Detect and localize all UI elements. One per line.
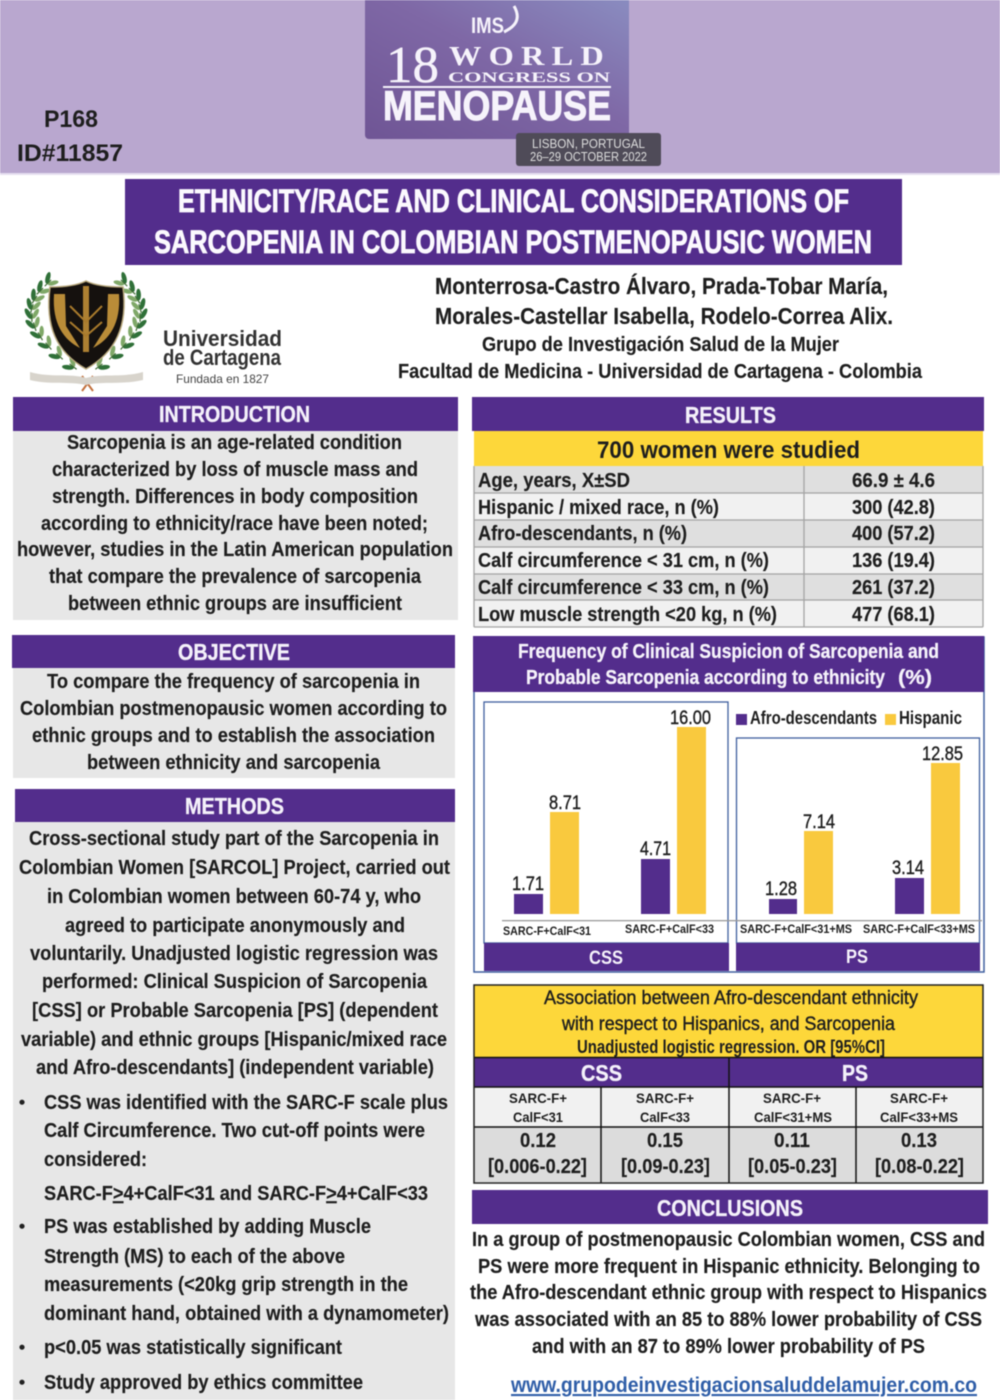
methods paragraph: Cross-sectional study part of the Sarcopenia in bbox=[29, 828, 439, 850]
methods bullet: PS: PS was established by adding Muscle bbox=[44, 1216, 371, 1238]
association cells: [0.09-0.23] bbox=[621, 1156, 710, 1178]
heading: introduction bbox=[13, 397, 458, 431]
congress location badge bbox=[516, 133, 661, 166]
table rows: 400 (57.2) bbox=[852, 523, 935, 545]
bar chart: PS: SARC-F+CalF<33+MS bbox=[863, 922, 975, 936]
sample size banner bbox=[474, 431, 983, 466]
authors and affiliation: Morales-Castellar Isabella, Rodelo-Correa Alix. bbox=[435, 303, 893, 329]
bar chart: PS: 3.14 bbox=[892, 858, 924, 879]
association cells: SARC-F+ bbox=[890, 1090, 948, 1106]
icon: laurel wreath bbox=[22, 270, 150, 376]
panel: conclusions bbox=[470, 1190, 988, 1358]
methods bullet: CSS: SARC-F>4+CalF<31 and SARC-F>4+CalF<33 bbox=[44, 1183, 428, 1205]
methods paragraph: Colombian Women [SARCOL] Project, carried out bbox=[19, 857, 450, 879]
association heading bbox=[474, 985, 983, 1057]
conclusions text bbox=[470, 1229, 987, 1358]
PS label bar: PS bbox=[846, 947, 868, 968]
methods paragraph: [CSS] or Probable Sarcopenia [PS] (dependent bbox=[32, 1000, 438, 1022]
congress logo: IMS bbox=[471, 13, 504, 38]
chart heading: Probable Sarcopenia according to ethnicity bbox=[526, 667, 886, 689]
bar chart: PS: SARC-F+CalF<31+MS bbox=[740, 922, 852, 936]
poster id: P168 bbox=[44, 106, 98, 133]
panel: frequency chart bbox=[473, 636, 984, 972]
methods paragraph: voluntarily. Unadjusted logistic regression was bbox=[30, 943, 438, 965]
association group headers: CSS bbox=[581, 1060, 622, 1086]
association group headers bbox=[474, 1058, 983, 1087]
methods bullet: CSS bbox=[19, 1092, 448, 1205]
methods paragraph: and Afro-descendants] (independent variable) bbox=[36, 1057, 434, 1079]
bar chart: CSS: 8.71 bbox=[549, 793, 581, 814]
methods bullet: PS: measurements (<20kg grip strength in the bbox=[44, 1274, 408, 1296]
authors and affiliation: Monterrosa-Castro Álvaro, Prada-Tobar María, bbox=[435, 272, 888, 299]
association cells: CalF<31 bbox=[513, 1109, 563, 1125]
table rows: Afro-descendants, n (%) bbox=[478, 523, 687, 545]
congress logo: CONGRESS ON bbox=[448, 70, 610, 86]
icon: ribbon and staves bbox=[30, 372, 143, 391]
methods paragraph: agreed to participate anonymously and bbox=[65, 915, 405, 937]
legend bbox=[736, 708, 962, 728]
association cells: 0.13 bbox=[901, 1130, 937, 1152]
introduction text: Sarcopenia is an age-related condition bbox=[67, 432, 402, 454]
congress logo bbox=[365, 0, 629, 139]
table rows bbox=[474, 466, 983, 627]
heading: methods: METHODS bbox=[185, 793, 284, 819]
association cells: [0.08-0.22] bbox=[875, 1156, 964, 1178]
panel: association table bbox=[474, 985, 983, 1183]
table rows: 136 (19.4) bbox=[852, 550, 935, 572]
table rows: Calf circumference < 31 cm, n (%) bbox=[478, 550, 769, 572]
objective text: ethnic groups and to establish the association bbox=[32, 725, 435, 747]
methods bullet: CSS: Calf Circumference. Two cut-off points were bbox=[44, 1120, 425, 1142]
association cells bbox=[474, 985, 983, 1183]
heading: introduction: INTRODUCTION bbox=[159, 401, 310, 427]
heading: objective bbox=[12, 635, 455, 668]
methods paragraph: variable) and ethnic groups [Hispanic/mixed race bbox=[21, 1029, 447, 1051]
methods bullet: PS: Strength (MS) to each of the above bbox=[44, 1246, 345, 1268]
association cells: SARC-F+ bbox=[636, 1090, 694, 1106]
methods paragraph bbox=[19, 828, 450, 1079]
introduction text: that compare the prevalence of sarcopenia bbox=[49, 566, 422, 588]
methods bullet: significance: p<0.05 was statistically significant bbox=[44, 1337, 342, 1359]
bar chart: PS: 1.28 bbox=[765, 879, 797, 900]
university name: de Cartagena bbox=[163, 345, 282, 370]
introduction text: however, studies in the Latin American population bbox=[17, 539, 453, 561]
association cells: CalF<33 bbox=[640, 1109, 690, 1125]
heading: conclusions bbox=[472, 1190, 988, 1224]
objective text: Colombian postmenopausic women according to bbox=[20, 698, 447, 720]
top banner bbox=[0, 0, 1000, 175]
authors and affiliation: Grupo de Investigación Salud de la Mujer bbox=[482, 334, 839, 356]
congress location badge: LISBON, PORTUGAL bbox=[532, 136, 645, 151]
introduction text: characterized by loss of muscle mass and bbox=[52, 459, 418, 481]
methods bullet: CSS: considered: bbox=[44, 1149, 147, 1171]
bar chart: PS: 12.85 bbox=[922, 744, 963, 765]
introduction text: according to ethnicity/race have been noted; bbox=[41, 513, 428, 535]
heading: results: RESULTS bbox=[685, 402, 776, 428]
panel: results table bbox=[472, 397, 984, 627]
university name bbox=[163, 326, 282, 386]
table rows: Hispanic / mixed race, n (%) bbox=[478, 497, 719, 519]
bar chart: CSS bbox=[484, 702, 729, 971]
methods paragraph: performed: Clinical Suspicion of Sarcopenia bbox=[42, 971, 428, 993]
university name: Universidad bbox=[163, 326, 282, 351]
objective text: To compare the frequency of sarcopenia in bbox=[47, 671, 420, 693]
table rows: 261 (37.2) bbox=[852, 577, 935, 599]
introduction text: strength. Differences in body composition bbox=[52, 486, 418, 508]
bar chart: CSS: SARC-F+CalF<31 bbox=[503, 924, 591, 938]
poster id bbox=[17, 106, 123, 167]
table rows: Age, years, X±SD bbox=[478, 470, 630, 492]
objective text bbox=[20, 671, 447, 774]
association cells: [0.006-0.22] bbox=[488, 1156, 587, 1178]
CSS label bar: CSS bbox=[589, 948, 623, 969]
university logo bbox=[22, 270, 282, 391]
association cells: CalF<31+MS bbox=[754, 1109, 832, 1125]
association heading: Unadjusted logistic regression. OR [95%CI] bbox=[577, 1037, 885, 1057]
legend: Afro-descendants bbox=[750, 708, 877, 728]
authors and affiliation bbox=[398, 272, 923, 383]
panel: methods bbox=[13, 789, 455, 1400]
association cells: 0.11 bbox=[774, 1130, 810, 1152]
introduction text: between ethnic groups are insufficient bbox=[68, 593, 402, 615]
CSS label bar bbox=[484, 943, 729, 971]
bar chart: CSS: 1.71 bbox=[512, 874, 544, 895]
objective text: between ethnicity and sarcopenia bbox=[87, 752, 381, 774]
methods bullet: CSS: CSS was identified with the SARC-F scale plus bbox=[44, 1092, 448, 1114]
methods bullet: PS bbox=[19, 1216, 449, 1325]
authors and affiliation: Facultad de Medicina - Universidad de Cartagena - Colombia bbox=[398, 361, 923, 383]
chart heading: (%) bbox=[898, 667, 932, 689]
table rows: Calf circumference < 33 cm, n (%) bbox=[478, 577, 769, 599]
association cells: 0.15 bbox=[647, 1130, 683, 1152]
poster id: ID#11857 bbox=[17, 140, 123, 167]
chart heading bbox=[473, 636, 984, 692]
table rows: 477 (68.1) bbox=[852, 604, 935, 626]
table rows: Low muscle strength <20 kg, n (%) bbox=[478, 604, 777, 626]
bar chart: CSS: SARC-F+CalF<33 bbox=[625, 922, 714, 936]
heading: results bbox=[472, 397, 984, 431]
association group headers: PS bbox=[842, 1060, 868, 1086]
title bbox=[125, 179, 902, 265]
methods bullet: ethics: Study approved by ethics committee bbox=[44, 1372, 363, 1394]
sample size banner: 700 women were studied bbox=[597, 437, 860, 464]
methods paragraph: in Colombian women between 60-74 y, who bbox=[47, 886, 421, 908]
heading: methods bbox=[15, 789, 455, 822]
bar chart: CSS: 16.00 bbox=[670, 708, 711, 729]
table rows: 300 (42.8) bbox=[852, 497, 935, 519]
conclusions text: and with an 87 to 89% lower probability of PS bbox=[532, 1336, 925, 1358]
congress logo: 18 bbox=[386, 37, 439, 94]
association cells: SARC-F+ bbox=[763, 1090, 821, 1106]
bar chart: PS bbox=[736, 738, 980, 971]
bar chart: PS: 7.14 bbox=[803, 812, 835, 833]
congress location badge: 26–29 OCTOBER 2022 bbox=[530, 149, 647, 164]
congress logo: WORLD bbox=[449, 41, 611, 71]
university name: Fundada en 1827 bbox=[176, 372, 269, 386]
association cells: CalF<33+MS bbox=[880, 1109, 958, 1125]
bar chart: CSS: 4.71 bbox=[640, 839, 671, 860]
panel: objective bbox=[12, 635, 455, 778]
panel: introduction bbox=[13, 397, 458, 620]
heading: conclusions: CONCLUSIONS bbox=[657, 1195, 803, 1221]
heading: objective: OBJECTIVE bbox=[178, 639, 290, 665]
association heading: Association between Afro-descendant ethnicity bbox=[544, 988, 918, 1009]
legend: Hispanic bbox=[899, 708, 962, 728]
association cells: 0.12 bbox=[520, 1130, 556, 1152]
icon: shield bbox=[49, 281, 124, 369]
chart heading: Frequency of Clinical Suspicion of Sarcopenia and bbox=[518, 641, 939, 663]
association heading: with respect to Hispanics, and Sarcopenia bbox=[561, 1014, 895, 1035]
introduction text bbox=[17, 432, 453, 615]
PS label bar bbox=[736, 943, 980, 971]
methods bullet: PS: dominant hand, obtained with a dynamometer) bbox=[44, 1303, 449, 1325]
association cells: [0.05-0.23] bbox=[748, 1156, 837, 1178]
table rows: 66.9 ± 4.6 bbox=[852, 470, 935, 492]
association cells: SARC-F+ bbox=[509, 1090, 567, 1106]
congress logo: MENOPAUSE bbox=[383, 82, 611, 129]
